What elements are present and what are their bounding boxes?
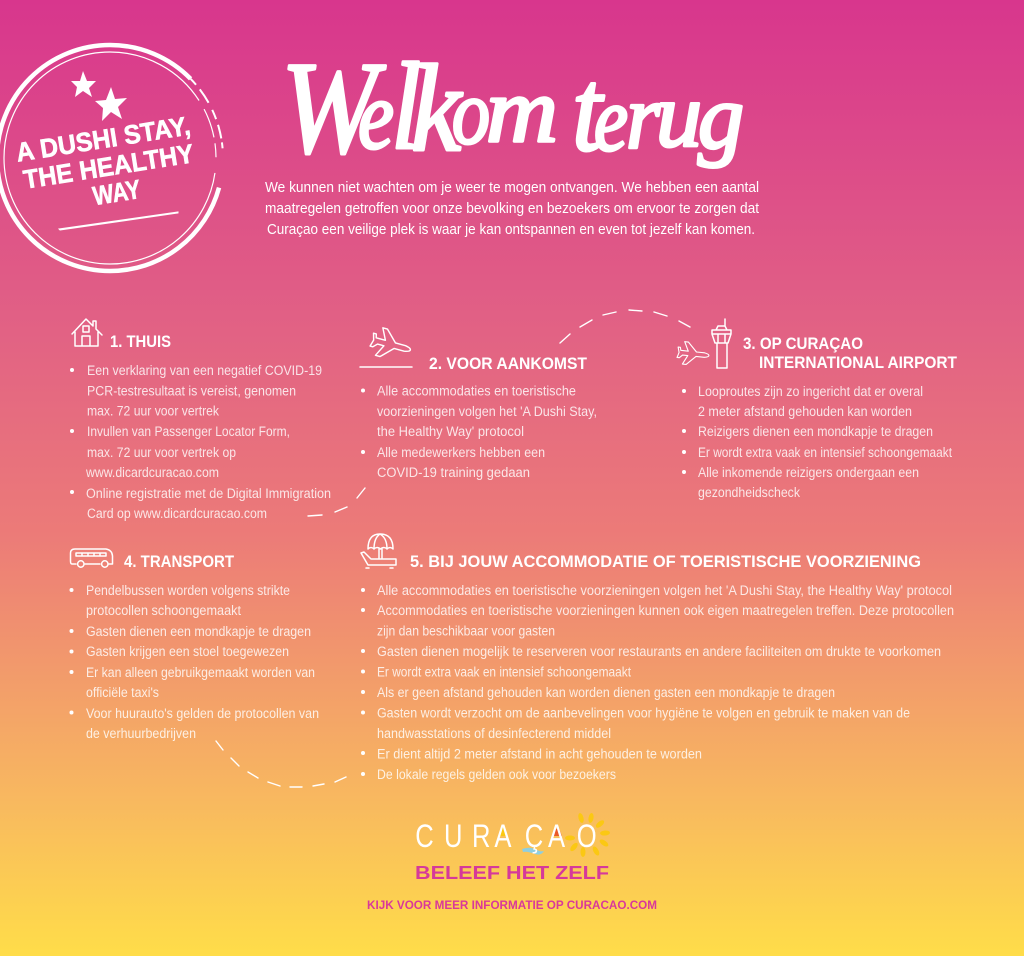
panel: 5. Bij jouw accommodatie of toeristische voorziening: [361, 534, 954, 782]
stamp: A Dushi Stay, the Healthy Way: WAY: [91, 174, 143, 211]
footer link text: KIJK VOOR MEER INFORMATIE OP CURACAO.COM: [367, 898, 657, 912]
title: Welkom terug: W: [281, 34, 386, 181]
icon: bus: [70, 549, 112, 567]
bullet list: voor aankomst: Alle medewerkers hebben een: [377, 445, 545, 460]
bullet list: voor aankomst: Alle accommodaties en toeristische: [377, 384, 576, 398]
icon: plane and control tower: [676, 319, 731, 368]
icon: sunbed and parasol: [361, 534, 396, 568]
heading: 3. Op Curaçao International Airport: [743, 335, 957, 372]
bullet list: thuis: www.dicardcuracao.com: [85, 465, 219, 480]
bullet list: transport: [70, 583, 319, 741]
bullet list: op Curaçao: Looproutes zijn zo ingericht dat er overal: [698, 384, 923, 399]
bullet list: accommodatie: [361, 583, 954, 782]
bullet list: thuis: max. 72 uur voor vertrek op: [87, 445, 236, 460]
stamp: A Dushi Stay, the Healthy Way: [0, 45, 223, 271]
bullet list: thuis: max. 72 uur voor vertrek: [87, 404, 219, 418]
bullet list: accommodatie: Accommodaties en toeristische voorzieningen kunnen ook eigen maatregelen treffen. Deze protocollen: [377, 603, 954, 618]
bullet list: accommodatie: Als er geen afstand gehouden kan worden dienen gasten een mondkapje te dragen: [377, 685, 835, 700]
title: Welkom terug: [281, 34, 744, 181]
bullet list: accommodatie: handwasstations of desinfecterend middel: [377, 726, 611, 741]
bullet list: op Curaçao: 2 meter afstand gehouden kan worden: [698, 404, 912, 419]
title: Welkom terug: e: [358, 62, 394, 170]
bullet list: op Curaçao: [682, 384, 952, 500]
intro text: maatregelen getroffen voor onze bevolking en bezoekers om ervoor te zorgen dat: [265, 201, 759, 217]
bullet list: accommodatie: Er dient altijd 2 meter afstand in acht gehouden te worden: [377, 746, 702, 762]
bullet list: transport: Gasten krijgen een stoel toegewezen: [86, 644, 289, 659]
intro text: Curaçao een veilige plek is waar je kan ontspannen en even tot jezelf kan komen.: [267, 222, 755, 238]
bullet list: transport: Voor huurauto's gelden de protocollen van: [86, 706, 319, 721]
bullet list: transport: Pendelbussen worden volgens strikte: [86, 583, 290, 598]
panel: 4. Transport: [70, 549, 319, 741]
bullet list: thuis: [70, 363, 331, 521]
icon: house: [72, 319, 102, 346]
bullet list: op Curaçao: gezondheidscheck: [698, 485, 800, 500]
bullet list: accommodatie: Alle accommodaties en toeristische voorzieningen volgen het 'A Dushi Stay, the Healthy Way' protocol: [377, 583, 952, 598]
bullet list: op Curaçao: Alle inkomende reizigers ondergaan een: [698, 465, 919, 480]
title: Welkom terug: k: [411, 40, 463, 177]
bullet list: op Curaçao: Er wordt extra vaak en intensief schoongemaakt: [698, 445, 952, 460]
bullet list: accommodatie: De lokale regels gelden ook voor bezoekers: [377, 767, 616, 782]
stamp: A Dushi Stay, the Healthy Way: A DUSHI STAY,: [14, 110, 192, 168]
title: Welkom terug: t: [572, 45, 605, 176]
bullet list: op Curaçao: Reizigers dienen een mondkapje te dragen: [698, 424, 933, 439]
bullet list: accommodatie: Er wordt extra vaak en intensief schoongemaakt: [377, 664, 631, 680]
heading: 4. Transport: 4. TRANSPORT: [124, 553, 234, 571]
heading: 3. Op Curaçao International Airport: INTERNATIONAL AIRPORT: [759, 354, 957, 372]
accents inside letters: [498, 827, 562, 855]
intro text: [265, 180, 759, 238]
title: Welkom terug: l: [391, 38, 421, 175]
panel: 2. Voor aankomst: [360, 326, 597, 480]
bullet list: thuis: Een verklaring van een negatief COVID-19: [87, 363, 322, 378]
bullet list: transport: Er kan alleen gebruikgemaakt worden van: [86, 665, 315, 680]
intro text: We kunnen niet wachten om je weer te mogen ontvangen. We hebben een aantal: [265, 180, 759, 196]
logo: Curaçao: [415, 813, 610, 883]
icon: departing plane: [360, 326, 414, 367]
arrow: dashed route 1 to 2: [308, 488, 365, 516]
title: Welkom terug: e: [594, 68, 628, 170]
wordmark: CURAÇAO: [415, 819, 597, 855]
title: Welkom terug: g: [698, 66, 744, 168]
bullet list: voor aankomst: the Healthy Way' protocol: [377, 424, 524, 439]
bullet list: thuis: Online registratie met de Digital Immigration: [86, 486, 331, 501]
heading: 1. Thuis: 1. THUIS: [110, 333, 171, 351]
bullet list: thuis: Invullen van Passenger Locator Form,: [87, 424, 290, 439]
icon: sun: [565, 813, 610, 857]
heading: 3. Op Curaçao International Airport: 3. OP CURAÇAO: [743, 335, 863, 353]
heading: 5. Bij jouw accommodatie of toeristische voorziening: 5. BIJ JOUW ACCOMMODATIE OF TOERISTISCHE VOORZIENING: [410, 553, 921, 571]
bullet list: thuis: Card op www.dicardcuracao.com: [87, 506, 267, 521]
bullet list: accommodatie: Gasten dienen mogelijk te reserveren voor restaurants en andere faciliteiten om drukte te voorkomen: [377, 644, 941, 659]
bullet list: accommodatie: Gasten wordt verzocht om de aanbevelingen voor hygiëne te volgen en gebruik te maken van de: [377, 706, 910, 720]
bullet list: voor aankomst: [361, 384, 597, 480]
bullet list: transport: Gasten dienen een mondkapje te dragen: [86, 624, 311, 639]
bullet list: transport: de verhuurbedrijven: [86, 726, 196, 741]
heading: 2. Voor aankomst: 2. VOOR AANKOMST: [429, 355, 587, 373]
bullet list: thuis: PCR-testresultaat is vereist, genomen: [87, 384, 296, 398]
panel: 1. Thuis: [70, 319, 331, 521]
bullet list: voor aankomst: COVID-19 training gedaan: [377, 465, 530, 480]
bullet list: transport: protocollen schoongemaakt: [86, 603, 241, 618]
arrow: dashed route 2 to 3: [560, 310, 690, 343]
bullet list: voor aankomst: voorzieningen volgen het 'A Dushi Stay,: [377, 404, 597, 419]
panel: 3. Op Curaçao International Airport: [676, 319, 957, 500]
title: Welkom terug: m: [486, 59, 558, 161]
title: Welkom terug: u: [656, 64, 702, 166]
title: Welkom terug: r: [626, 66, 661, 168]
bullet list: transport: officiële taxi's: [86, 685, 159, 700]
arrow: dashed route 4 to 5: [216, 741, 346, 787]
bullet list: accommodatie: zijn dan beschikbaar voor gasten: [377, 624, 555, 638]
title: Welkom terug: o: [452, 61, 490, 163]
tagline: Beleef het zelf: BELEEF HET ZELF: [415, 863, 609, 883]
stamp: A Dushi Stay, the Healthy Way: THE HEALTHY: [21, 138, 196, 195]
